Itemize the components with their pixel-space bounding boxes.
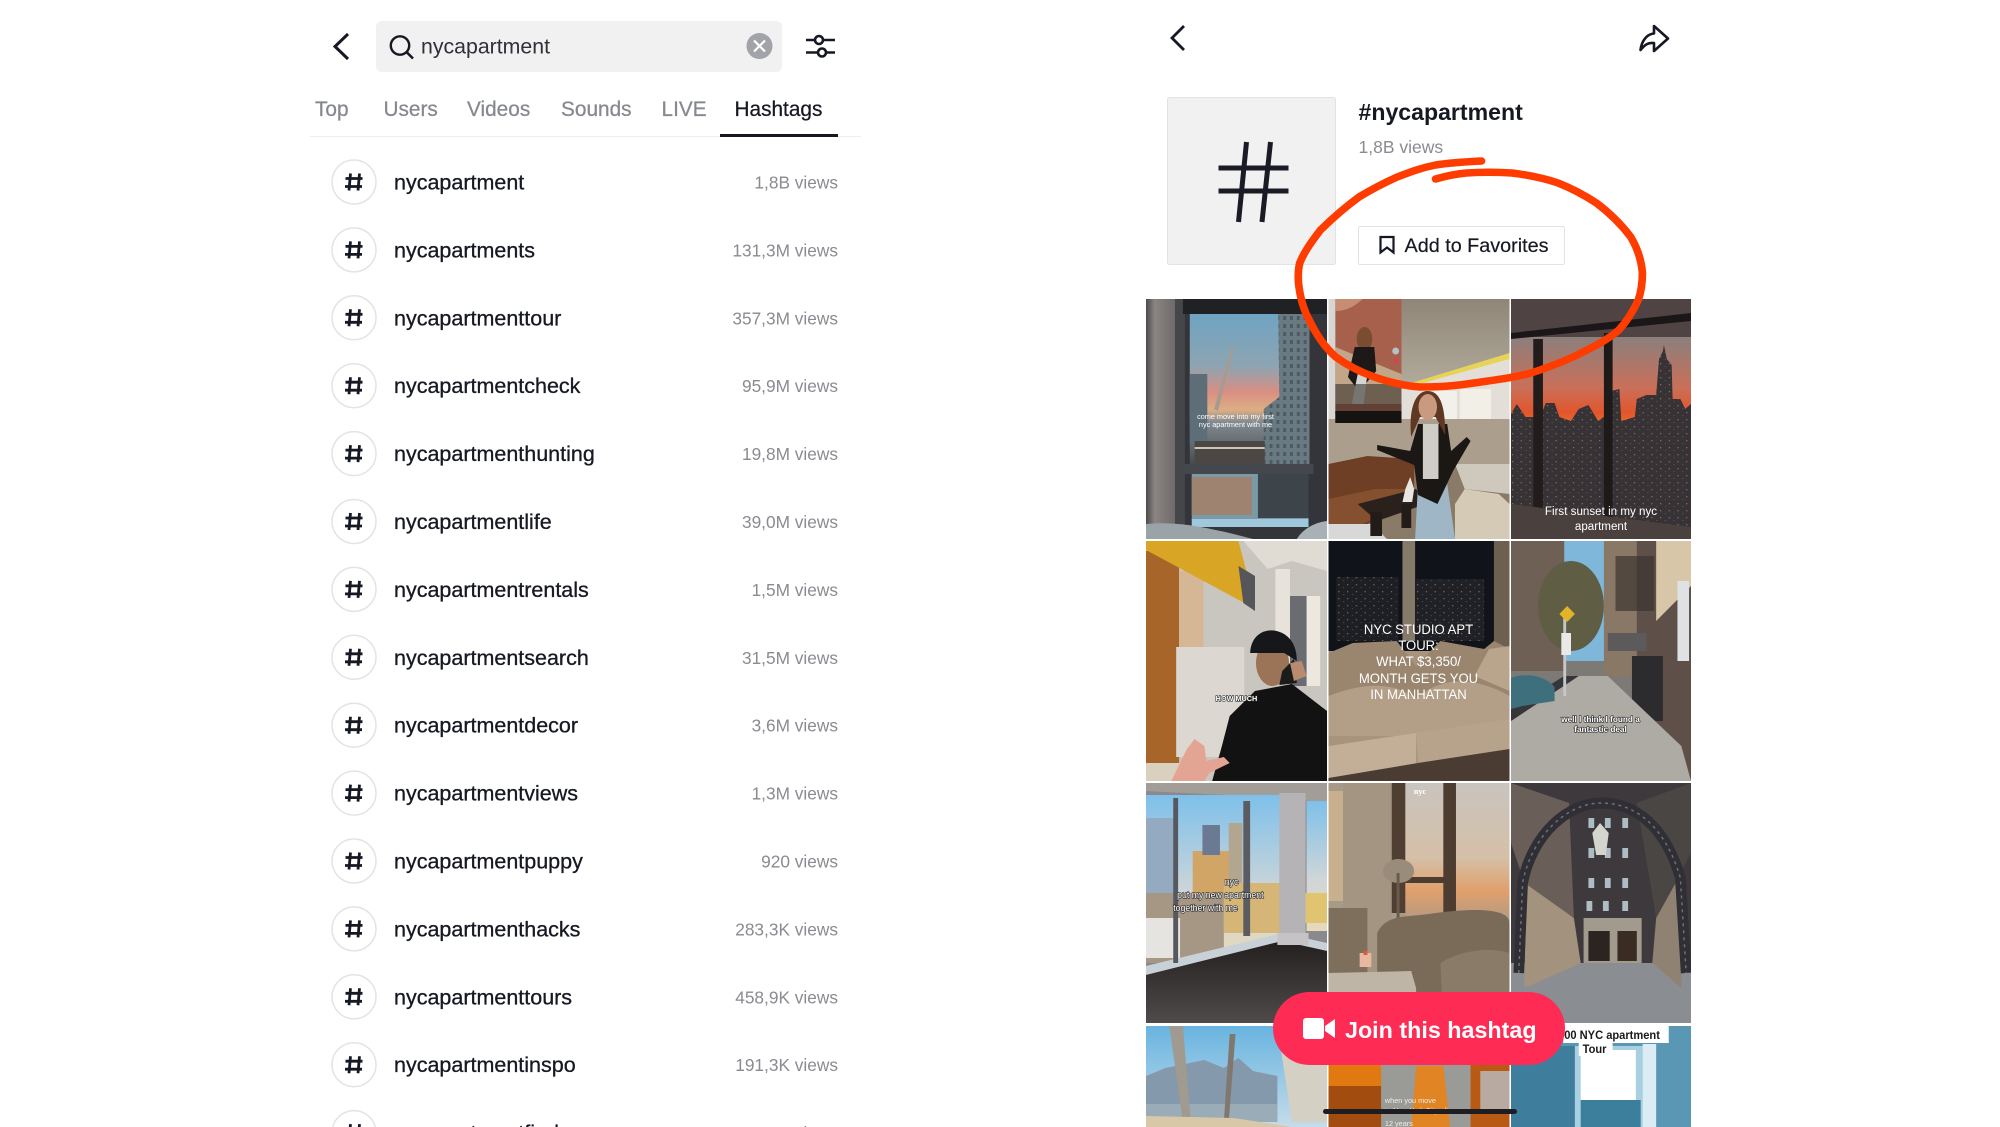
hashtag row: nycapartmentinspo: 191,3K views <box>735 1055 838 1075</box>
caption: when you move <box>1384 1096 1436 1105</box>
photo: window with crane <box>1146 299 1327 539</box>
hashtag row: nycapartmentinspo: nycapartmentinspo <box>394 1053 576 1077</box>
tab bar: LIVE <box>662 98 707 121</box>
search bar <box>376 21 782 72</box>
caption: NYC STUDIO APT <box>1364 622 1473 637</box>
panel: hashtag search results <box>310 21 861 1127</box>
join this hashtag button <box>1273 992 1565 1065</box>
hashtag row: nycapartmentviews <box>332 771 838 815</box>
hashtag title: #nycapartment <box>1358 99 1523 125</box>
hashtag row: nycapartmenthunting <box>332 432 838 476</box>
hashtag row: nycapartmenttours: nycapartmenttours <box>394 985 572 1009</box>
caption: put my new apartment <box>1177 890 1264 900</box>
hashtag row: nycapartmentpuppy: nycapartmentpuppy <box>394 850 583 874</box>
hashtag row: nycapartmentlife: 39,0M views <box>742 512 838 532</box>
photo: beige living room at sunset <box>1328 783 1510 992</box>
hashtag row: nycapartmentcheck: 95,9M views <box>742 376 838 396</box>
icon: back chevron <box>335 34 348 59</box>
annotation: hand-drawn red circle around button <box>1298 161 1642 387</box>
hashtag row: nycapartmentcheck <box>332 364 838 408</box>
icon: back chevron <box>1172 26 1184 50</box>
photo: blue apartment tour <box>1511 1026 1691 1127</box>
hashtag row: nycapartmentlife: nycapartmentlife <box>394 510 552 534</box>
photo: man on phone under yellow awning <box>1146 541 1327 781</box>
caption <box>1173 877 1264 913</box>
hashtag row: nycapartment <box>332 160 838 204</box>
hashtag row: nycapartmenthacks: 283,3K views <box>735 919 838 939</box>
caption <box>1359 622 1478 702</box>
join this hashtag button: Join this hashtag <box>1345 1017 1537 1043</box>
hashtag row: nycapartments <box>332 228 838 272</box>
hashtag row: nycapartmenttours <box>332 975 838 1019</box>
caption <box>1384 1096 1455 1127</box>
caption: nyc apartment with me <box>1199 420 1272 429</box>
hashtag row: nycapartmenttours: 458,9K views <box>735 987 838 1007</box>
caption: come move into my first <box>1197 412 1274 421</box>
photo: orange-lit tower <box>1328 1065 1510 1127</box>
hashtag row: nycapartments: nycapartments <box>394 238 535 262</box>
hashtag row: nycapartmenttour: nycapartmenttour <box>394 306 561 330</box>
hashtag row: nycapartmentsearch <box>332 635 838 679</box>
hashtag row: nycapartmenthunting: 19,8M views <box>742 444 838 464</box>
caption: First sunset in my nyc <box>1545 504 1657 518</box>
icon: filter sliders <box>806 36 835 56</box>
hashtag cover tile <box>1168 98 1336 264</box>
hashtag row: nycapartmentcheck: nycapartmentcheck <box>394 374 581 398</box>
caption: well I think I found a <box>1560 714 1640 724</box>
photo: woman in loft with inset screenshot <box>1328 299 1510 539</box>
hashtag row: nycapartmenthunting: nycapartmenthunting <box>394 442 595 466</box>
hashtag row: nycapartmentsearch: nycapartmentsearch <box>394 646 589 670</box>
hashtag row: nycapartmentpuppy <box>332 839 838 883</box>
hashtag row: nycapartmenttour: 357,3M views <box>732 308 838 328</box>
caption: nyc <box>1414 787 1426 796</box>
photo: street with fantastic deal caption: fantastic deal <box>1574 724 1627 734</box>
panel: hashtag detail page <box>1146 26 1691 1127</box>
caption: 00 NYC apartment <box>1564 1030 1660 1042</box>
hashtag row: nycapartmentrentals: 1,5M views <box>752 580 838 600</box>
icon: video camera <box>1303 1018 1335 1039</box>
caption: nyc <box>1225 877 1239 887</box>
woman <box>1415 484 1455 539</box>
photo: skyline through glass <box>1146 1026 1327 1127</box>
inset screenshot <box>1328 299 1401 423</box>
caption: HOW MUCH <box>1216 694 1257 703</box>
caption: MONTH GETS YOU <box>1359 671 1478 686</box>
hashtag row: nycapartmentrentals: nycapartmentrentals <box>394 578 589 602</box>
hashtag row: nycapartment: 1,8B views <box>754 172 838 192</box>
add to favorites button <box>1358 226 1564 264</box>
photo: corner apartment with city views <box>1146 783 1327 1023</box>
tab bar: Top <box>315 98 349 121</box>
caption: TOUR: <box>1398 638 1439 653</box>
photo: ornate iron archway courtyard <box>1511 783 1691 1023</box>
man <box>1212 684 1327 781</box>
tab bar: Videos <box>467 98 530 121</box>
hashtag row: nycapartmentfinds (cropped) <box>332 1111 838 1127</box>
caption <box>1197 412 1274 429</box>
add to favorites button: Add to Favorites <box>1404 235 1549 257</box>
photo grid <box>1146 299 1691 1127</box>
photo: blue apartment tour: Tour <box>1583 1044 1607 1056</box>
view count: 1,8B views <box>1358 137 1443 157</box>
photo: street with fantastic deal caption <box>1511 541 1691 781</box>
hashtag row: nycapartmentviews: 1,3M views <box>752 784 838 804</box>
caption: together with me <box>1173 903 1238 913</box>
photo: first sunset skyline <box>1511 299 1691 539</box>
hashtag row: nycapartments: 131,3M views <box>732 240 838 260</box>
search bar: nycapartment <box>421 34 550 58</box>
hashtag row: nycapartmenttour <box>332 296 838 340</box>
photo: first sunset skyline: apartment <box>1575 519 1628 533</box>
caption: IN MANHATTAN <box>1370 687 1467 702</box>
tab bar: Hashtags <box>734 98 822 121</box>
hashtag row: nycapartmentsearch: 31,5M views <box>742 648 838 668</box>
hashtag row: nycapartmentrentals <box>332 567 838 611</box>
hashtag row: nycapartmentpuppy: 920 views <box>761 852 838 872</box>
icon: share arrow <box>1640 26 1668 51</box>
hashtag row: nycapartmentdecor <box>332 703 838 747</box>
caption: WHAT $3,350/ <box>1376 654 1461 669</box>
hashtag row: nycapartmenthacks: nycapartmenthacks <box>394 917 580 941</box>
hashtag row: nycapartmentdecor: 3,6M views <box>752 716 838 736</box>
tab bar: Users <box>384 98 438 121</box>
photo: NYC studio apartment tour <box>1328 541 1510 781</box>
hashtag row: nycapartment: nycapartment <box>394 170 524 194</box>
hashtag row: nycapartmentlife <box>332 500 838 544</box>
hashtag row: nycapartmentdecor: nycapartmentdecor <box>394 714 578 738</box>
hashtag row: nycapartmentviews: nycapartmentviews <box>394 782 578 806</box>
hashtag row: nycapartmenthacks <box>332 907 838 951</box>
home indicator bar <box>1323 1109 1517 1114</box>
caption: to New York City after <box>1385 1106 1455 1115</box>
hashtag row: nycapartmentinspo <box>332 1043 838 1087</box>
tab bar <box>310 98 861 137</box>
tab bar: Sounds <box>561 98 632 121</box>
